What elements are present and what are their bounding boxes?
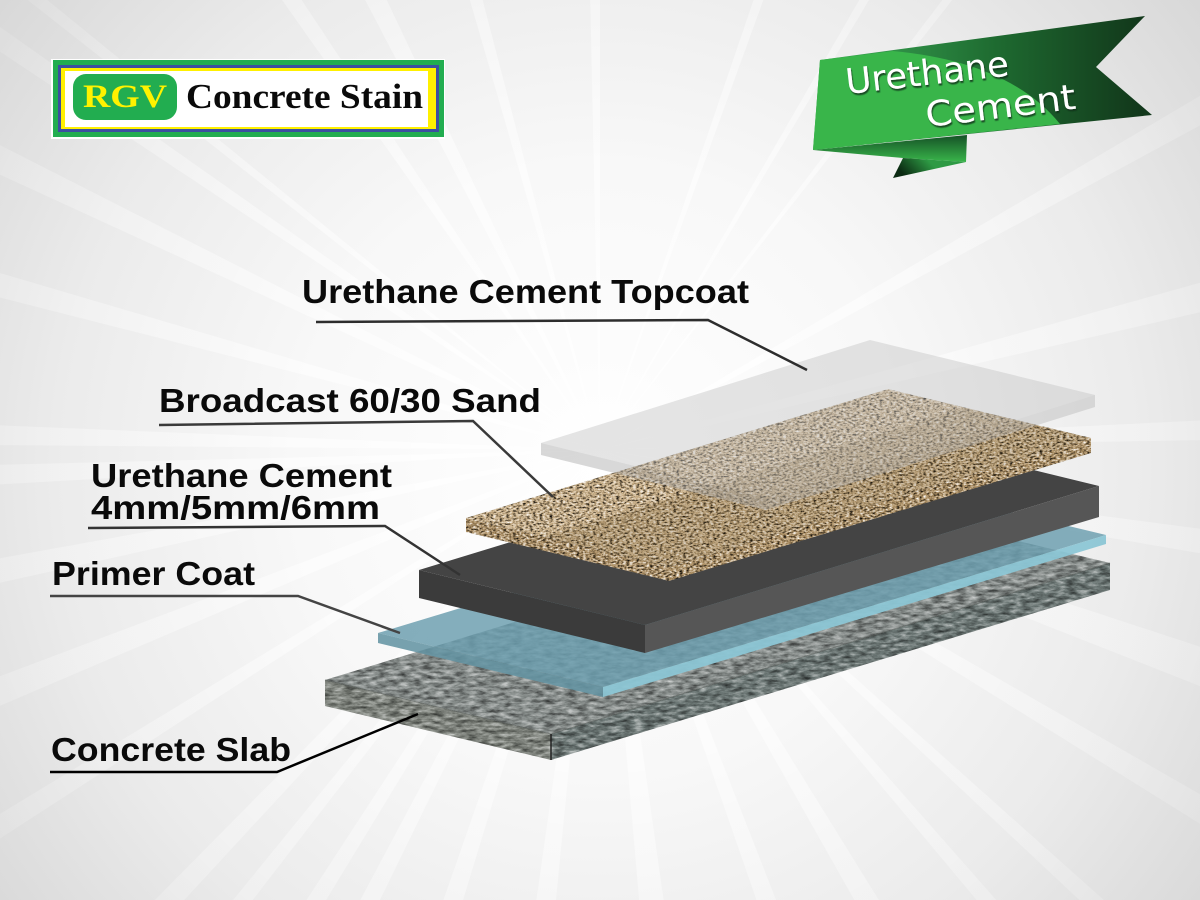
layer: concrete slab: [325, 509, 1110, 760]
ribbon banner: Urethane Cement: [813, 16, 1152, 178]
layer: urethane cement topcoat: [541, 340, 1095, 510]
ribbon body light green: [813, 51, 1060, 150]
label: Primer Coat: [50, 555, 400, 633]
banner text: Urethane: [843, 45, 1011, 103]
ribbon fold: [813, 135, 967, 162]
banner text: [843, 45, 1078, 136]
ribbon tail: [893, 158, 966, 178]
label: Concrete Slab: Concrete Slab: [51, 731, 291, 768]
logo: RGV Concrete Stain: RGV: [83, 79, 167, 115]
layer: urethane cement: [419, 431, 1099, 653]
label: Urethane Cement Topcoat: Urethane Cement Topcoat: [302, 273, 749, 310]
layer: broadcast sand: [466, 389, 1091, 581]
logo: RGV Concrete Stain: [51, 59, 445, 139]
logo: RGV Concrete Stain: Concrete Stain: [186, 77, 423, 116]
label: Concrete Slab: [50, 714, 418, 772]
ribbon body dark end: [813, 16, 1152, 150]
label: Broadcast 60/30 Sand: Broadcast 60/30 Sand: [159, 382, 541, 419]
layer: primer coat: [378, 481, 1106, 697]
label: Broadcast 60/30 Sand: [159, 382, 553, 497]
label: Urethane Cement 4mm/5mm/6mm: 4mm/5mm/6mm: [91, 489, 380, 526]
label: Urethane Cement 4mm/5mm/6mm: Urethane Cement: [91, 457, 392, 494]
label: Urethane Cement Topcoat: [302, 273, 807, 370]
banner text: Cement: [923, 78, 1078, 136]
label: Primer Coat: Primer Coat: [52, 555, 255, 592]
label: Urethane Cement 4mm/5mm/6mm: [88, 457, 460, 575]
